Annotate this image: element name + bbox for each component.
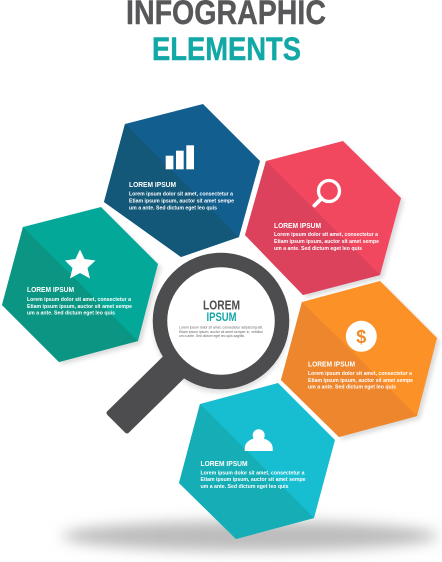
icon: bar chart bbox=[166, 145, 194, 169]
lens heading: LOREM bbox=[203, 298, 240, 312]
text block: red panel: Etiam ipsum ipsum, auctor sit amet sempe bbox=[274, 239, 379, 245]
text block: blue panel: Lorem ipsum dolor sit amet, consectetur a bbox=[129, 192, 233, 198]
panel: red hexagon bbox=[245, 141, 404, 298]
heading: red panel: LOREM IPSUM bbox=[274, 221, 321, 230]
text block: green panel: Lorem ipsum dolor sit amet, consectetur a bbox=[27, 297, 131, 303]
lens text block bbox=[179, 326, 263, 338]
panel: orange hexagon bbox=[281, 281, 440, 440]
lens text block: Lorem ipsum dolor sit amet, consectetur adipiscing elit. bbox=[179, 326, 263, 330]
title line: ELEMENTS: ELEMENTS bbox=[152, 31, 301, 67]
panel: blue hexagon bbox=[104, 104, 260, 257]
lens text block: um a ante. Sed dictum eget leo quis sagittis. bbox=[179, 334, 245, 338]
icon: user bbox=[245, 429, 273, 451]
text block: red panel bbox=[274, 232, 379, 252]
text block: red panel: Lorem ipsum dolor sit amet, consectetur a bbox=[274, 232, 378, 238]
text block: teal panel: Etiam ipsum ipsum, auctor sit amet sempe bbox=[200, 477, 306, 483]
text block: orange panel: Etiam ipsum ipsum, auctor sit amet sempe bbox=[308, 378, 413, 384]
magnifier handle bbox=[109, 355, 186, 431]
text block: teal panel bbox=[200, 470, 306, 490]
text block: green panel: um a ante. Sed dictum eget leo quis bbox=[27, 311, 115, 317]
central magnifying glass bbox=[109, 257, 289, 431]
icon: dollar coin: $ bbox=[356, 327, 366, 347]
lens text block: Etiam ipsum ipsum, auctor sit amet semper in, vestibul bbox=[179, 330, 263, 334]
text block: blue panel bbox=[129, 192, 234, 212]
text block: teal panel: um a ante. Sed dictum eget leo quis bbox=[200, 484, 289, 490]
icon: star bbox=[65, 250, 96, 278]
icon: magnifier bbox=[314, 180, 340, 206]
panel: teal hexagon bbox=[179, 383, 335, 539]
text block: orange panel: um a ante. Sed dictum eget leo quis bbox=[308, 385, 396, 391]
heading: orange panel: LOREM IPSUM bbox=[308, 360, 355, 368]
title bbox=[126, 0, 326, 67]
heading: teal panel: LOREM IPSUM bbox=[200, 459, 248, 468]
text block: blue panel: Etiam ipsum ipsum, auctor sit amet sempe bbox=[129, 198, 234, 204]
lens subheading: IPSUM bbox=[206, 310, 236, 324]
text block: green panel bbox=[27, 297, 132, 317]
icon: dollar coin bbox=[346, 321, 377, 352]
heading: blue panel: LOREM IPSUM bbox=[129, 180, 176, 189]
text block: red panel: um a ante. Sed dictum eget leo quis bbox=[274, 246, 362, 252]
magnifier lens bbox=[160, 260, 282, 382]
panel: green hexagon bbox=[2, 207, 161, 365]
text block: orange panel bbox=[308, 371, 413, 391]
text block: teal panel: Lorem ipsum dolor sit amet, consectetur a bbox=[200, 470, 305, 476]
text block: green panel: Etiam ipsum ipsum, auctor sit amet sempe bbox=[27, 304, 132, 310]
heading: green panel: LOREM IPSUM bbox=[27, 285, 74, 294]
ground shadow bbox=[62, 521, 438, 551]
text block: blue panel: um a ante. Sed dictum eget leo quis bbox=[129, 206, 217, 212]
text block: orange panel: Lorem ipsum dolor sit amet, consectetur a bbox=[308, 371, 412, 377]
magnifier shadow bbox=[153, 257, 289, 393]
